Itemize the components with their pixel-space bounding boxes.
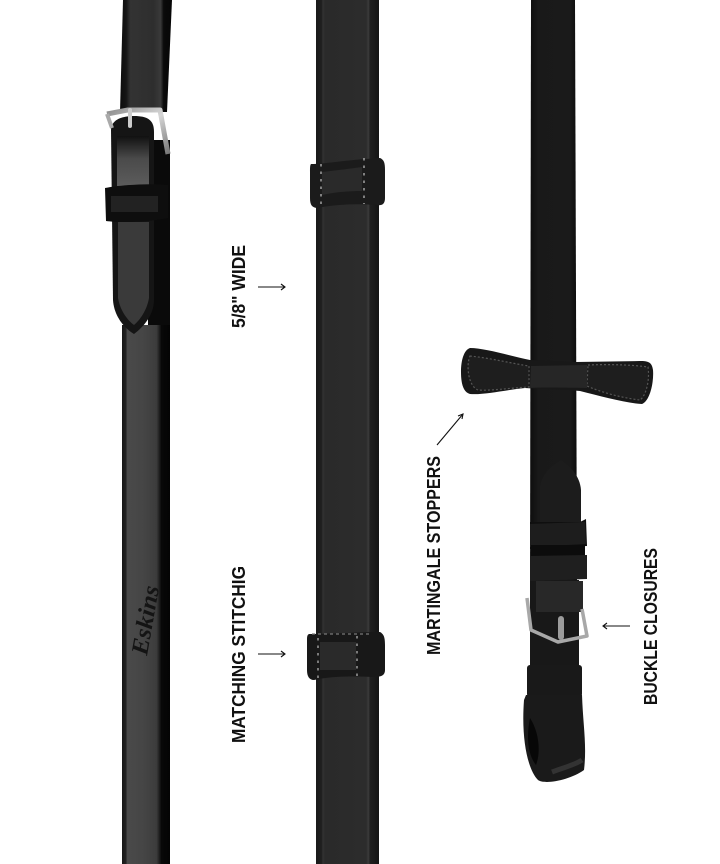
label: martingale stoppers: MARTINGALE STOPPERS	[424, 456, 444, 655]
strap body	[530, 0, 577, 600]
keeper pair	[530, 519, 587, 612]
strap under the keeper	[148, 140, 170, 330]
arrow: buckle closures	[603, 623, 630, 629]
arrow: matching stitching	[258, 651, 285, 657]
centre strap with keepers	[307, 0, 385, 864]
strap body	[316, 0, 379, 864]
label: matching stitching: MATCHING STITCHIG	[229, 566, 249, 743]
label: buckle closures: BUCKLE CLOSURES	[641, 548, 661, 705]
logo: embossed signature: Eskins	[127, 584, 165, 658]
end loop	[523, 695, 585, 782]
left strap with buckle and logo	[105, 0, 172, 864]
icon: buckle frame and pin	[527, 598, 587, 642]
lower keeper	[527, 665, 582, 697]
keeper: upper	[310, 158, 385, 208]
arrow: martingale stoppers	[437, 414, 463, 445]
buckle tongue end	[111, 116, 154, 334]
right strap with stopper and buckle	[461, 0, 653, 782]
strap upper section	[120, 0, 172, 112]
strap lower section	[530, 580, 579, 670]
label: 5/8" wide: 5/8" WIDE	[229, 245, 249, 328]
keeper: lower	[307, 632, 385, 680]
martingale stopper	[461, 348, 653, 404]
strap lower section	[122, 325, 170, 864]
strap tip above keepers	[540, 460, 581, 524]
icon: silver buckle	[107, 110, 168, 154]
keeper loop	[105, 184, 168, 222]
arrow: 5/8" wide	[258, 284, 285, 290]
